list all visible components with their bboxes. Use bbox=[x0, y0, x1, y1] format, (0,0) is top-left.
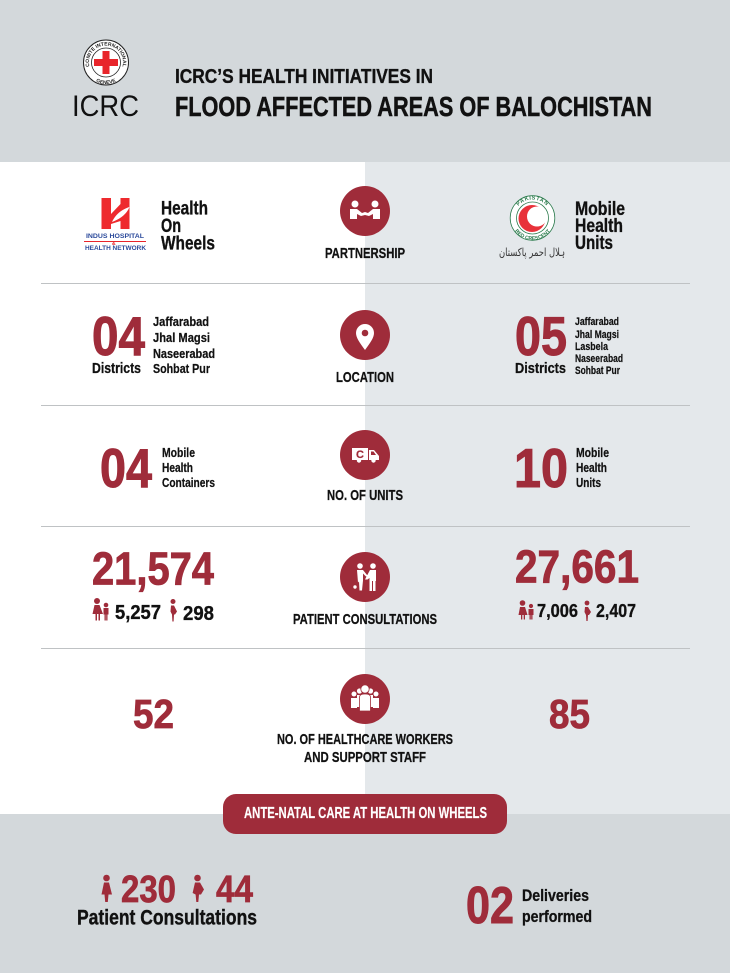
text: mobile health units: Units bbox=[576, 476, 601, 490]
header band bbox=[0, 0, 730, 162]
list: districts left: Naseerabad bbox=[153, 346, 215, 361]
list: districts right: Sohbat Pur bbox=[575, 365, 621, 377]
stat: 27,661 consultations bbox=[515, 540, 639, 621]
text: deliveries performed bbox=[522, 887, 592, 926]
icon: pregnant woman bbox=[170, 599, 177, 622]
icon: truck: C bbox=[356, 449, 364, 461]
list: districts left: Jhal Magsi bbox=[153, 330, 210, 345]
ICRC logo: ICRC bbox=[72, 90, 139, 123]
heading: Mobile Health Units: Mobile bbox=[575, 199, 625, 220]
text: mobile health units: Mobile bbox=[576, 446, 609, 460]
stat: 27,661 consultations: 2,407 bbox=[596, 600, 636, 621]
stat: 04 containers: 04 bbox=[100, 437, 152, 499]
Pakistan Red Crescent logo: PAKISTAN bbox=[516, 196, 548, 206]
ICRC logo: GENEVE bbox=[96, 78, 116, 84]
title bbox=[175, 66, 652, 122]
list: districts left: Jaffarabad bbox=[153, 314, 209, 329]
list: districts left: Sohbat Pur bbox=[153, 361, 210, 376]
list: districts right bbox=[575, 316, 623, 377]
Pakistan Red Crescent logo: RED CRESCENT bbox=[515, 228, 550, 240]
text: mobile health containers bbox=[162, 446, 215, 490]
label: healthcare workers: NO. OF HEALTHCARE WORKERS bbox=[277, 731, 453, 748]
banner: ante-natal care bbox=[223, 794, 507, 834]
list: districts left bbox=[153, 314, 215, 376]
stat: antenatal patient consultations: 44 bbox=[216, 869, 253, 911]
icon: woman bbox=[102, 875, 112, 902]
stat: antenatal patient consultations: Patient Consultations bbox=[77, 906, 257, 930]
Pakistan Red Crescent logo: ہلال احمر پاکستان bbox=[499, 246, 565, 259]
icon: staff group bbox=[340, 674, 390, 724]
footer band bbox=[0, 814, 730, 973]
list: districts right: Naseerabad bbox=[575, 353, 623, 365]
text: mobile health units bbox=[576, 446, 609, 490]
banner: ante-natal care: ANTE-NATAL CARE AT HEALTH ON WHEELS bbox=[244, 805, 487, 822]
stat: 52 staff: 52 bbox=[133, 691, 174, 737]
heading: Health On Wheels bbox=[161, 198, 215, 254]
stat: 21,574 consultations: 5,257 bbox=[115, 602, 161, 624]
label: no. of units: NO. OF UNITS bbox=[327, 487, 403, 504]
heading: Health On Wheels: Health bbox=[161, 198, 208, 220]
heading: Health On Wheels: On bbox=[161, 216, 181, 237]
stat: 85 staff: 85 bbox=[549, 691, 590, 737]
text: mobile health units: Health bbox=[576, 461, 607, 475]
icon: location bbox=[340, 310, 390, 360]
label: partnership: PARTNERSHIP bbox=[325, 245, 405, 262]
ICRC logo bbox=[72, 40, 139, 123]
list: districts right: Jaffarabad bbox=[575, 316, 619, 328]
text: deliveries performed: Deliveries bbox=[522, 887, 589, 905]
icon: pregnant woman bbox=[193, 875, 204, 902]
stat: 21,574 consultations bbox=[92, 542, 214, 625]
Indus Hospital logo: INDUS HOSPITAL bbox=[86, 233, 144, 240]
Indus Hospital logo: & bbox=[112, 241, 116, 247]
icon: pregnant woman bbox=[584, 601, 591, 621]
title: ICRC’S HEALTH INITIATIVES IN bbox=[175, 66, 433, 88]
stat: 21,574 consultations: 298 bbox=[183, 603, 214, 625]
icon: woman and child bbox=[92, 598, 108, 620]
ICRC logo: COMITE INTERNATIONAL bbox=[86, 42, 126, 67]
stat: 10 units: 10 bbox=[514, 437, 568, 499]
stat: 04 districts: 04 bbox=[92, 305, 145, 367]
heading: Mobile Health Units: Units bbox=[575, 233, 613, 254]
icon: truck bbox=[340, 430, 390, 480]
text: mobile health containers: Containers bbox=[162, 476, 215, 490]
list: districts right: Lasbela bbox=[575, 341, 609, 353]
stat: 05 districts: Districts bbox=[515, 360, 566, 377]
stat: 02 deliveries: 02 bbox=[466, 877, 514, 935]
Pakistan Red Crescent logo bbox=[499, 195, 565, 259]
heading: Mobile Health Units bbox=[575, 199, 625, 254]
label: healthcare workers bbox=[277, 731, 453, 766]
text: deliveries performed: performed bbox=[522, 908, 592, 926]
stat: 04 districts: Districts bbox=[92, 360, 141, 377]
Indus Hospital logo bbox=[84, 198, 146, 252]
text: mobile health containers: Health bbox=[162, 461, 193, 475]
heading: Health On Wheels: Wheels bbox=[161, 234, 215, 254]
label: location: LOCATION bbox=[336, 369, 394, 386]
stat: 27,661 consultations: 7,006 bbox=[537, 600, 578, 621]
Indus Hospital logo: HEALTH NETWORK bbox=[85, 245, 146, 252]
stat: 27,661 consultations: 27,661 bbox=[515, 540, 639, 592]
icon: consultation handshake bbox=[340, 552, 390, 602]
stat: antenatal patient consultations bbox=[77, 869, 257, 930]
stat: 05 districts: 05 bbox=[515, 305, 567, 367]
label: patient consultations: PATIENT CONSULTATIONS bbox=[293, 611, 437, 628]
stat: 21,574 consultations: 21,574 bbox=[92, 542, 214, 594]
text: mobile health containers: Mobile bbox=[162, 446, 195, 460]
icon: partnership bbox=[340, 186, 390, 236]
list: districts right: Jhal Magsi bbox=[575, 329, 619, 341]
stat: antenatal patient consultations: 230 bbox=[121, 869, 176, 911]
icon: woman and child bbox=[518, 600, 534, 620]
heading: Mobile Health Units: Health bbox=[575, 216, 623, 237]
label: healthcare workers: AND SUPPORT STAFF bbox=[304, 749, 426, 766]
